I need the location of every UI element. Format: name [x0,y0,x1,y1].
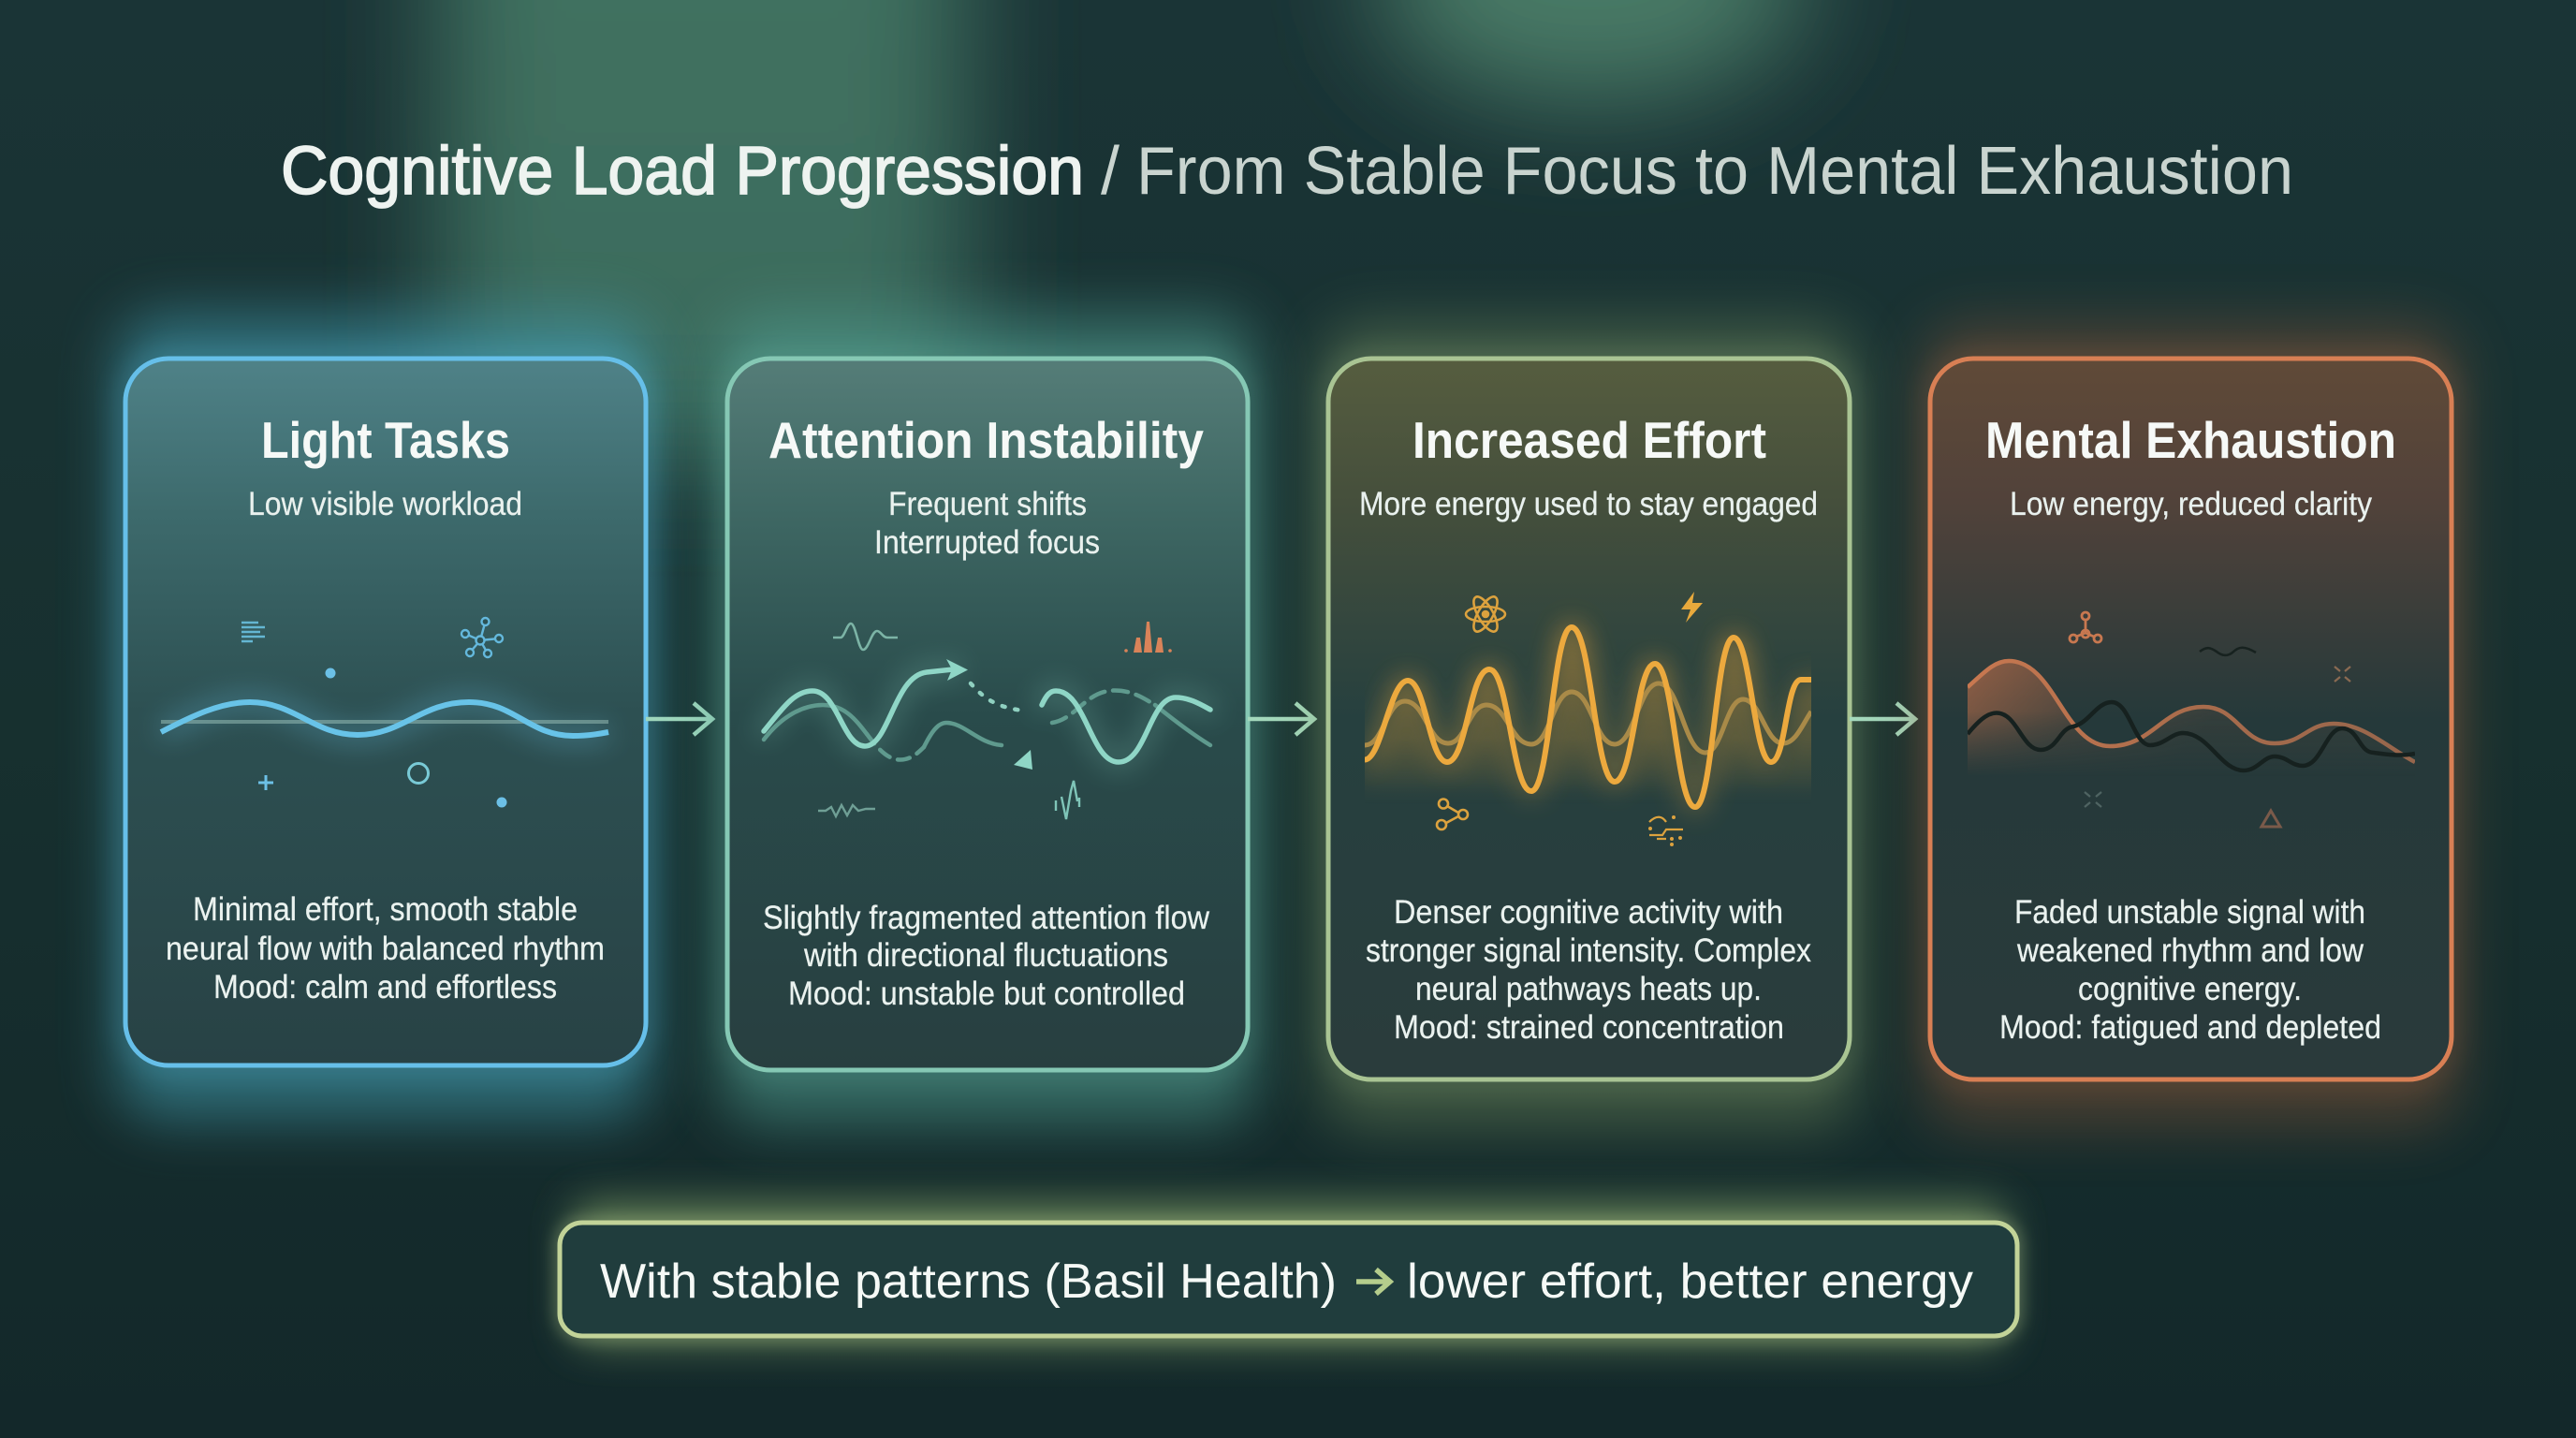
description: light tasks: Minimal effort, smooth stable [193,891,578,928]
icon: network [461,618,503,657]
chart: intense amber wave [1348,627,1835,807]
icon: dark squiggle [2200,648,2256,655]
icon: burst marks [2334,667,2350,682]
small markers [258,668,507,807]
icon: arrowheads [946,659,1032,770]
icon: atom [1466,594,1505,635]
description: light tasks [166,891,605,1005]
subtitle: frequent shifts: Frequent shifts [888,486,1087,522]
callout text [600,1255,1973,1309]
chart: smooth stable wave [161,702,608,736]
title [281,134,2293,209]
callout text: With stable patterns (Basil Health) [600,1255,1337,1309]
description: attention instability: with directional fluctuations [803,937,1168,974]
panel: increased effort [1320,323,1858,1128]
subtitle: low visible workload: Low visible workload [248,486,522,522]
subtitle: frequent shifts: Interrupted focus [874,524,1100,561]
description: mental exhaustion: weakened rhythm and low [2016,932,2364,969]
description: mental exhaustion: Faded unstable signal with [2014,894,2365,931]
heading: light tasks: Light Tasks [261,411,510,469]
title: / [1101,134,1120,209]
description: mental exhaustion [1999,894,2381,1046]
icon: text lines [242,623,265,641]
description: light tasks: neural flow with balanced rhythm [166,931,605,967]
heading: mental exhaustion: Mental Exhaustion [1985,411,2396,469]
subtitle: more energy: More energy used to stay engaged [1359,486,1818,522]
description: attention instability: Slightly fragmented attention flow [763,900,1210,936]
description: mental exhaustion: cognitive energy. [2078,971,2302,1007]
description: mental exhaustion: Mood: fatigued and depleted [1999,1009,2381,1046]
panel: attention instability [719,314,1256,1123]
icon: share [1437,800,1468,829]
chart: fragmented wave [764,669,1210,762]
subtitle: low energy: Low energy, reduced clarity [2010,486,2372,522]
panel: mental exhaustion [1922,323,2460,1128]
callout bar [560,1203,2017,1343]
panel: light tasks [117,314,651,1119]
icon: circuit [1648,815,1683,846]
icon: callout arrow [1356,1269,1390,1294]
heading: attention instability: Attention Instability [768,411,1204,469]
description: increased effort [1366,894,1811,1046]
description: increased effort: Mood: strained concentration [1394,1009,1784,1046]
title: Cognitive Load Progression [281,134,1084,209]
icon: bar spikes [1124,622,1172,653]
icon: vertical pulse [1056,781,1079,819]
description: increased effort: stronger signal intensity. Complex [1366,932,1811,969]
arrow 1 [646,703,712,735]
icon: pulse bottom [818,805,875,816]
icon: pulse top [833,624,898,650]
arrow 2 [1248,703,1314,735]
subtitle: frequent shifts [874,486,1100,561]
heading: increased effort: Increased Effort [1412,411,1766,469]
callout text: lower effort, better energy [1407,1255,1973,1309]
description: increased effort: neural pathways heats up. [1415,971,1762,1007]
title: From Stable Focus to Mental Exhaustion [1136,134,2293,209]
icon: faded triangle [2261,811,2280,827]
chart: faded signal [1968,661,2415,786]
description: attention instability [763,900,1210,1012]
description: attention instability: Mood: unstable but controlled [788,976,1185,1012]
description: light tasks: Mood: calm and effortless [213,969,557,1005]
description: increased effort: Denser cognitive activity with [1394,894,1783,931]
icon: grey burst [2085,792,2101,807]
icon: bolt [1681,592,1703,623]
arrow 3 [1850,703,1915,735]
icon: hub [2070,612,2101,642]
